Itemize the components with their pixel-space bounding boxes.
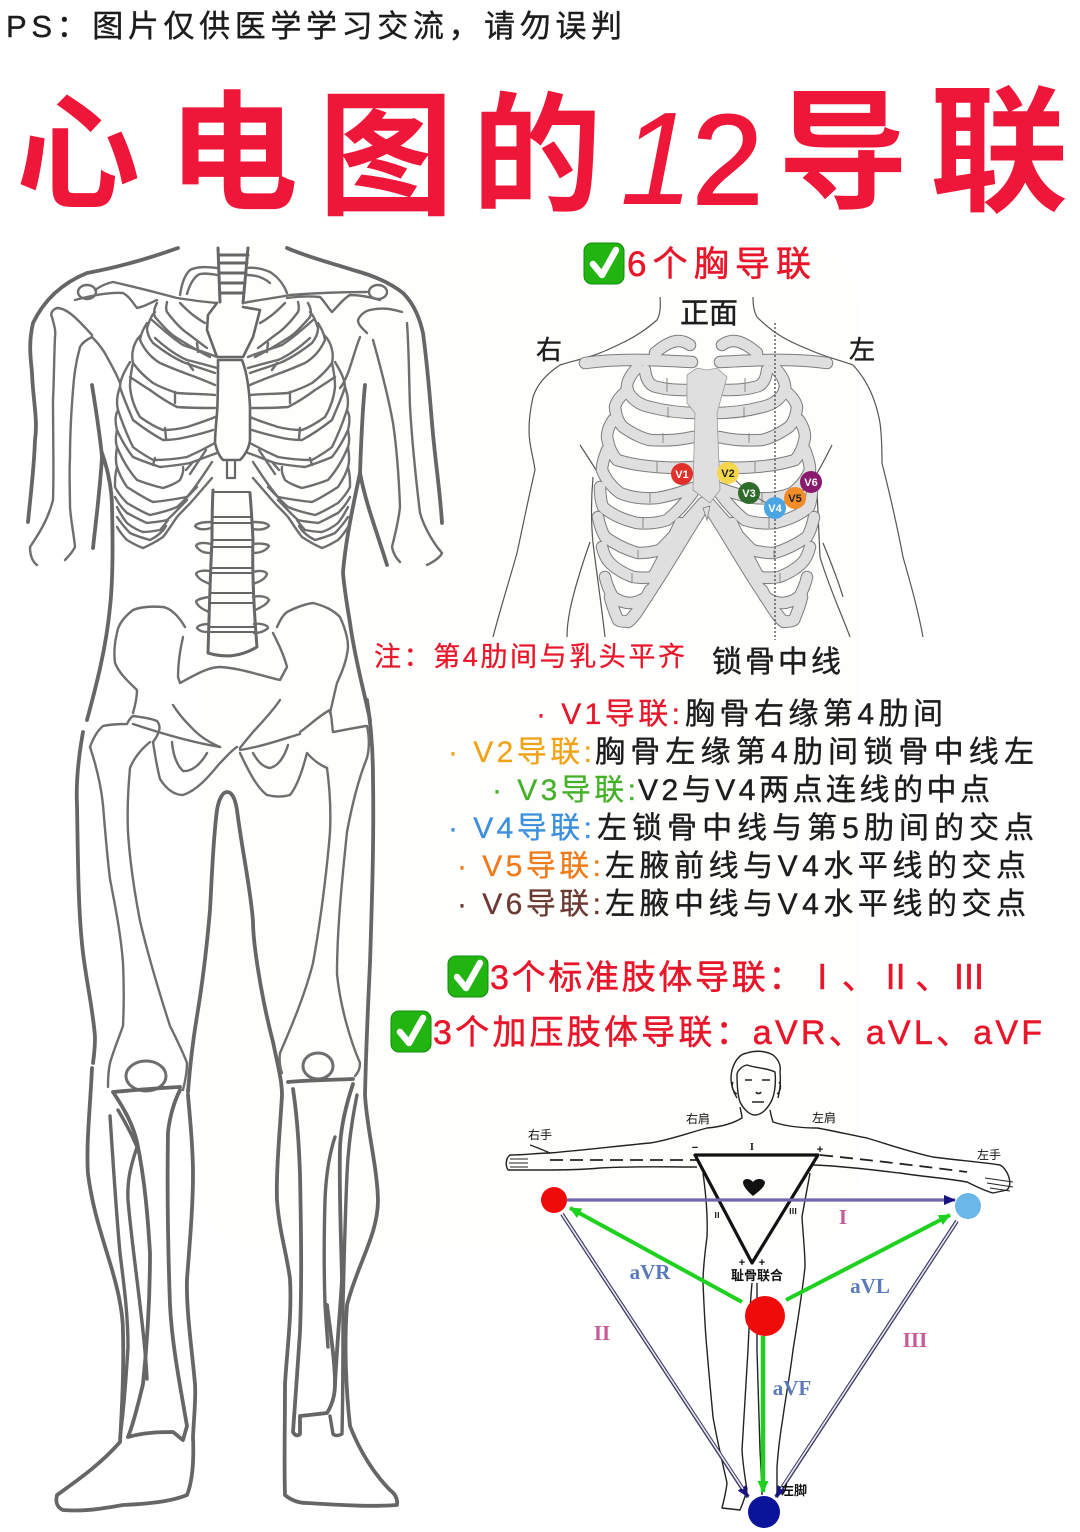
arrow: aVF (761, 1336, 765, 1492)
lead V2 description: · V2导联: (448, 736, 592, 769)
limb lead diagram (506, 1051, 1013, 1528)
lead V6 description: 左腋中线与V4水平线的交点 (605, 888, 1026, 921)
electrode V5 (784, 487, 806, 509)
lead V1 description: · V1导联: (536, 698, 680, 731)
full body skeleton illustration (28, 248, 442, 1511)
lead V5 description: 左腋前线与V4水平线的交点 (605, 850, 1026, 883)
human figure (506, 1051, 1013, 1510)
check icon: standard limb leads (448, 956, 488, 997)
label: left shoulder: 左肩 (812, 1110, 836, 1125)
arrow: lead III (776, 1221, 957, 1497)
midclavicular dotted line (774, 323, 776, 640)
title: 的 (472, 83, 602, 229)
lead V5 description: · V5导联: (457, 850, 601, 883)
lead label aVR: aVR (630, 1260, 671, 1284)
heading: augmented limb leads: 3个加压肢体导联：aVR、aVL、aVF (433, 1014, 1042, 1052)
heading: 6 chest leads: 6个胸导联 (627, 245, 811, 284)
disclaimer text: PS：图片仅供医学学习交流，请勿误判 (6, 9, 622, 44)
small polarity marks: I (750, 1142, 754, 1153)
lower leg bones (110, 1079, 357, 1440)
icon: heart (743, 1179, 765, 1196)
lumbar spine (208, 490, 257, 656)
lead V6 description: · V6导联: (457, 888, 601, 921)
label: right shoulder: 右肩 (686, 1111, 710, 1126)
small polarity marks: + (739, 1257, 745, 1269)
left ribs (115, 302, 217, 548)
lead V2 description: 胸骨左缘第4肋间锁骨中线左 (595, 736, 1034, 769)
label: left: 左 (849, 335, 875, 365)
node: left arm (955, 1193, 981, 1219)
heading: standard limb leads: 3个标准肢体导联：Ⅰ、Ⅱ、Ⅲ (490, 959, 986, 997)
check icon: chest leads heading (584, 243, 624, 284)
rib cartilage ticks (632, 378, 780, 583)
Einthoven triangle (695, 1155, 818, 1263)
electrode V1 (671, 463, 693, 485)
title: 心 (16, 87, 140, 225)
title: 图 (318, 81, 454, 233)
arrow: aVL (786, 1215, 950, 1300)
arrow: aVR (570, 1208, 742, 1302)
sternum (687, 368, 727, 503)
title: 导 (778, 80, 908, 226)
lead label I: I (839, 1205, 847, 1229)
label: left foot: 左脚 (781, 1483, 807, 1498)
electrode V2: V2 (721, 468, 735, 480)
check icon: augmented limb leads (391, 1011, 431, 1052)
electrode V4 (764, 497, 786, 519)
lead V4 description: 左锁骨中线与第5肋间的交点 (597, 812, 1034, 845)
title: 联 (930, 76, 1068, 230)
label: left hand: 左手 (977, 1147, 1001, 1162)
electrode V6 (800, 471, 822, 493)
chest lead diagram (493, 297, 923, 640)
title: 电 (168, 81, 298, 227)
spine processes (195, 522, 269, 633)
node: left leg (748, 1496, 780, 1528)
node: right arm (541, 1187, 567, 1213)
rib cage (115, 302, 350, 548)
title: 1 (620, 85, 693, 232)
lead label aVF: aVF (773, 1376, 811, 1400)
label: right: 右 (536, 335, 562, 365)
title (16, 76, 1068, 233)
label: right hand: 右手 (528, 1127, 552, 1142)
label: pubic symphysis: 耻骨联合 (731, 1268, 783, 1283)
arrow: lead I (567, 1198, 955, 1202)
node: central terminal (745, 1296, 785, 1336)
electrode V2 (717, 462, 739, 484)
arrow: lead II (562, 1214, 748, 1497)
lead V3 description: · V3导联: (492, 774, 636, 807)
connector between chest leads (728, 473, 811, 508)
small polarity marks: Ⅲ (789, 1207, 797, 1216)
lead label aVL: aVL (850, 1274, 890, 1298)
lead label III: III (903, 1328, 927, 1352)
lead V1 description: 胸骨右缘第4肋间 (685, 698, 943, 731)
lead label II: II (594, 1321, 610, 1345)
sternum (207, 303, 260, 478)
electrode V3 (738, 482, 760, 504)
small polarity marks: + (759, 1257, 765, 1269)
torso outline (493, 297, 923, 637)
title: 2 (692, 89, 763, 232)
electrode V5: V5 (788, 493, 802, 505)
lead V3 description: V2与V4两点连线的中点 (638, 774, 990, 807)
electrode V3: V3 (742, 488, 756, 500)
electrode V6: V6 (804, 477, 818, 489)
electrode V4: V4 (768, 503, 783, 515)
lead V4 description: · V4导联: (448, 812, 592, 845)
note: 注：第4肋间与乳头平齐 (374, 642, 685, 672)
small polarity marks: − (692, 1142, 698, 1154)
electrode V1: V1 (675, 469, 689, 481)
small polarity marks: Ⅱ (713, 1211, 721, 1220)
label: front: 正面 (680, 298, 738, 330)
small polarity marks: + (817, 1144, 823, 1156)
small polarity marks (692, 1142, 823, 1269)
upper arm bones (30, 267, 442, 565)
lead V1 description (536, 698, 943, 731)
label: midclavicular line: 锁骨中线 (712, 646, 841, 679)
xiphoid (703, 506, 710, 520)
pelvis and hip bones (90, 603, 369, 1091)
rib bands (585, 341, 827, 622)
body outline (28, 248, 442, 1511)
